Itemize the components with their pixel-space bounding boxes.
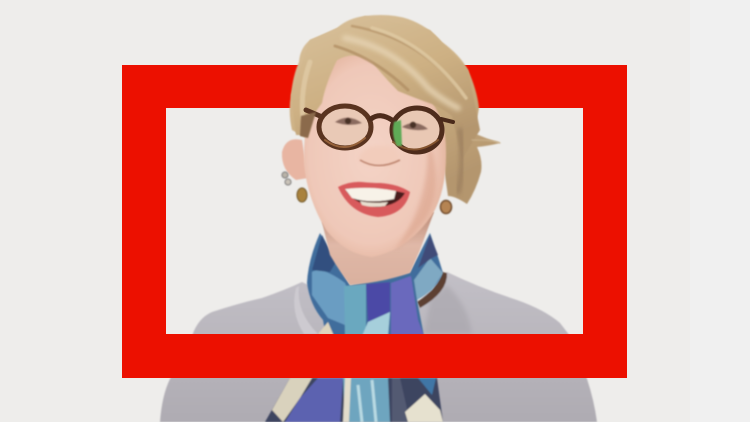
earrings [282,172,452,214]
fringe [291,16,480,160]
glasses detail [306,110,453,150]
scarf upper section [307,233,443,336]
left lens shadow [300,112,316,138]
ear [282,139,308,180]
scarf lower section [265,378,443,422]
eyes [335,118,428,130]
nose [358,146,400,166]
mouth [338,182,410,217]
red frame [122,65,627,378]
left lens [319,106,371,148]
face [304,52,446,257]
neck [322,212,434,285]
right lens [392,108,442,152]
person head [282,15,500,257]
green lens reflection [393,120,402,146]
cheek shading [395,150,436,250]
sweater [160,272,597,422]
hair back [290,15,500,204]
hair streaks [302,26,500,192]
